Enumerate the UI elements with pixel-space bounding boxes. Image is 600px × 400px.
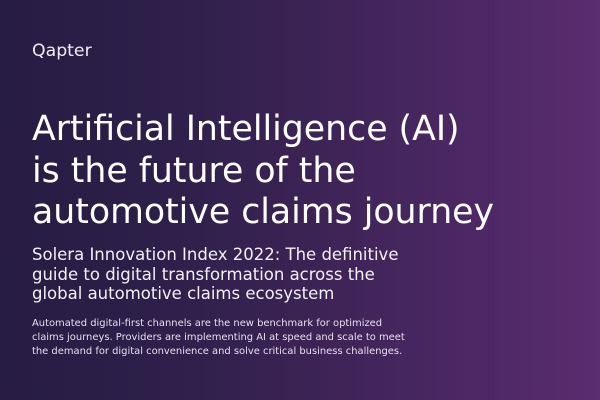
body text: claims journeys. Providers are implementing AI at speed and scale to meet <box>32 332 405 343</box>
subtitle: Solera Innovation Index 2022: The definitive <box>32 245 398 264</box>
brand name: Qapter <box>32 41 92 61</box>
subtitle: guide to digital transformation across the <box>32 265 375 284</box>
title: Artificial Intelligence (AI) <box>32 109 460 149</box>
subtitle <box>32 245 398 303</box>
body text: the demand for digital convenience and solve critical business challenges. <box>32 346 402 357</box>
body text: Automated digital-first channels are the new benchmark for optimized <box>32 318 382 329</box>
body text <box>32 318 405 357</box>
title <box>32 109 494 232</box>
title: automotive claims journey <box>32 192 494 232</box>
title: is the future of the <box>32 151 356 191</box>
subtitle: global automotive claims ecosystem <box>32 284 334 303</box>
